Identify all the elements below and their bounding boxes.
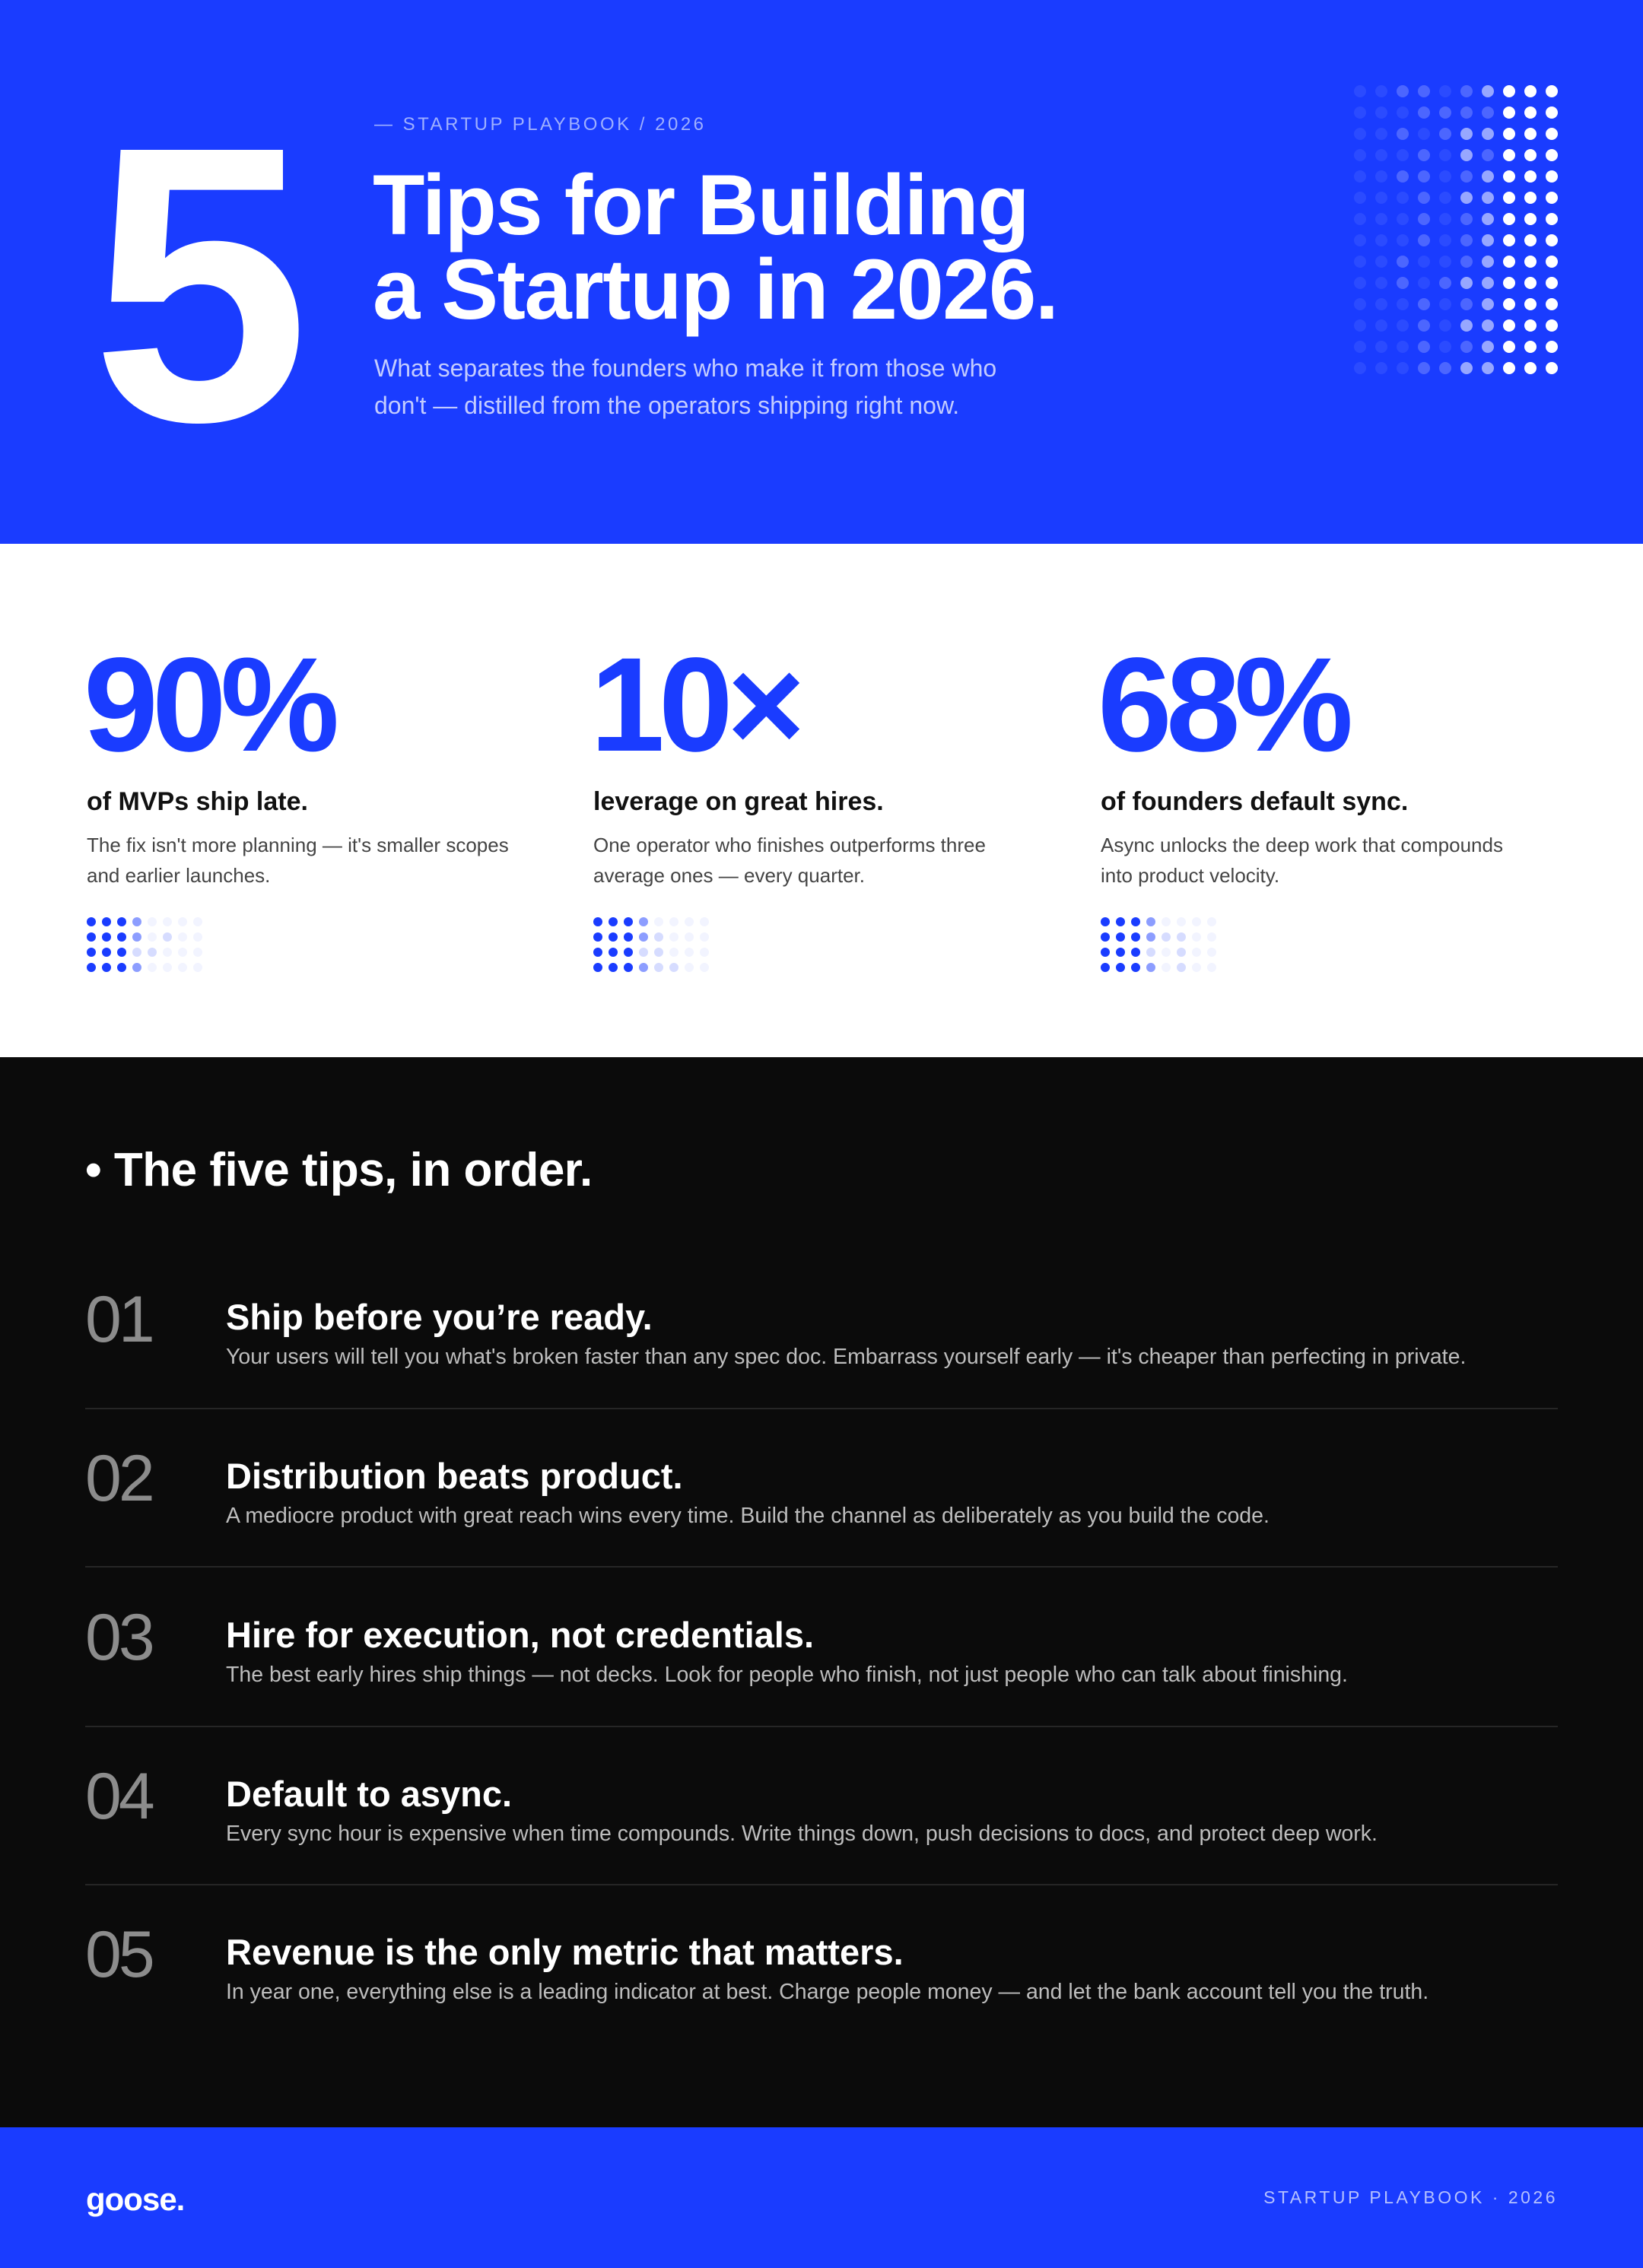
stat 1: The fix isn't more planning — it's smaller scopes xyxy=(87,834,509,856)
tip 02: 02 xyxy=(85,1442,152,1515)
dot chart 3 xyxy=(1101,917,1216,972)
stat 3: into product velocity. xyxy=(1101,864,1279,887)
dot chart 1 xyxy=(87,917,202,972)
section heading: • The five tips, in order. xyxy=(85,1144,593,1196)
stat 3: 68% xyxy=(1098,631,1347,780)
subtitle: What separates the founders who make it from those who xyxy=(374,354,996,382)
header panel xyxy=(0,0,1643,544)
big number 5: 5 xyxy=(91,65,302,503)
title: Tips for Building xyxy=(373,157,1028,253)
tip 05 xyxy=(85,1918,1428,2004)
stat 2: leverage on great hires. xyxy=(593,787,884,816)
tip 04 xyxy=(85,1760,1378,1846)
tip 01: Ship before you’re ready. xyxy=(226,1297,653,1337)
stat 3: of founders default sync. xyxy=(1101,787,1408,816)
tip 02: Distribution beats product. xyxy=(226,1456,683,1496)
logo: goose. xyxy=(86,2181,184,2217)
stat 3: Async unlocks the deep work that compounds xyxy=(1101,834,1503,856)
dot chart 2 xyxy=(593,917,709,972)
footer label: STARTUP PLAYBOOK · 2026 xyxy=(1263,2187,1558,2207)
title xyxy=(373,157,1057,337)
tip 04: 04 xyxy=(85,1760,152,1833)
stats panel xyxy=(0,544,1643,1057)
tip 04: Every sync hour is expensive when time compounds. Write things down, push decisions to docs, and protect deep work. xyxy=(226,1822,1378,1846)
tips panel xyxy=(0,1057,1643,2127)
tip 01: 01 xyxy=(85,1283,152,1356)
tip 05: In year one, everything else is a leading indicator at best. Charge people money — and let the bank account tell you the truth. xyxy=(226,1980,1428,2004)
tip 04: Default to async. xyxy=(226,1774,512,1814)
stat 2 xyxy=(590,631,986,972)
subtitle: don't — distilled from the operators shipping right now. xyxy=(374,392,959,419)
tip 02: A mediocre product with great reach wins every time. Build the channel as deliberately as you build the code. xyxy=(226,1504,1270,1528)
subtitle xyxy=(374,354,996,419)
stat 1 xyxy=(84,631,509,972)
stat 2: average ones — every quarter. xyxy=(593,864,865,887)
tip 05: 05 xyxy=(85,1918,152,1991)
tip 03: The best early hires ship things — not decks. Look for people who finish, not just people who can talk about finishing. xyxy=(226,1663,1348,1687)
stat 3 xyxy=(1098,631,1503,972)
tip 05: Revenue is the only metric that matters. xyxy=(226,1932,904,1972)
footer xyxy=(0,2127,1643,2268)
stat 1: 90% xyxy=(84,631,333,780)
tip 03: 03 xyxy=(85,1601,152,1674)
stat 1: and earlier launches. xyxy=(87,864,270,887)
tip 01: Your users will tell you what's broken faster than any spec doc. Embarrass yourself early — it's cheaper than perfecting in private. xyxy=(226,1345,1466,1369)
title: a Startup in 2026. xyxy=(373,242,1057,337)
stat 1: of MVPs ship late. xyxy=(87,787,308,816)
stat 2: 10× xyxy=(590,631,799,780)
tip 03 xyxy=(85,1601,1348,1687)
tip 01 xyxy=(85,1283,1466,1369)
tip 02 xyxy=(85,1442,1270,1528)
kicker: — STARTUP PLAYBOOK / 2026 xyxy=(374,114,707,135)
tip 03: Hire for execution, not credentials. xyxy=(226,1615,814,1655)
dot grid decoration xyxy=(1354,85,1558,374)
stat 2: One operator who finishes outperforms three xyxy=(593,834,986,856)
